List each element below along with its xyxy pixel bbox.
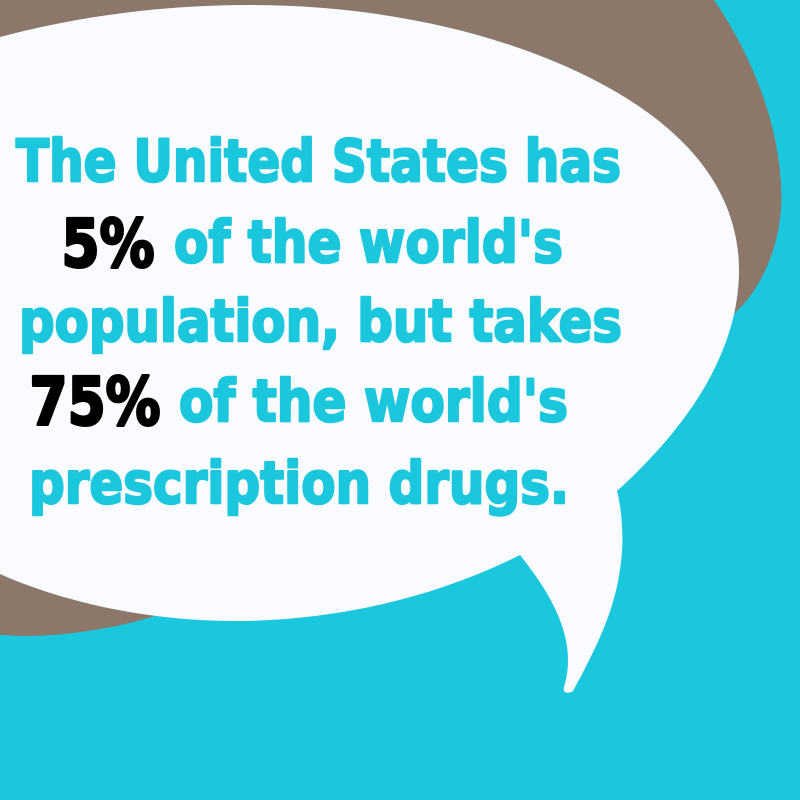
line 2: of the world's bbox=[174, 208, 563, 276]
brown back speech bubble bbox=[0, 0, 782, 636]
statistic text bbox=[16, 127, 622, 517]
line 1: The United States has bbox=[16, 127, 621, 195]
line 3: population, but takes bbox=[19, 287, 622, 355]
stat: 5%: 5% bbox=[62, 206, 154, 282]
white front speech bubble bbox=[0, 5, 739, 693]
line 4: of the world's bbox=[179, 367, 568, 435]
line 5: prescription drugs. bbox=[29, 449, 569, 517]
stat: 75%: 75% bbox=[30, 364, 160, 440]
